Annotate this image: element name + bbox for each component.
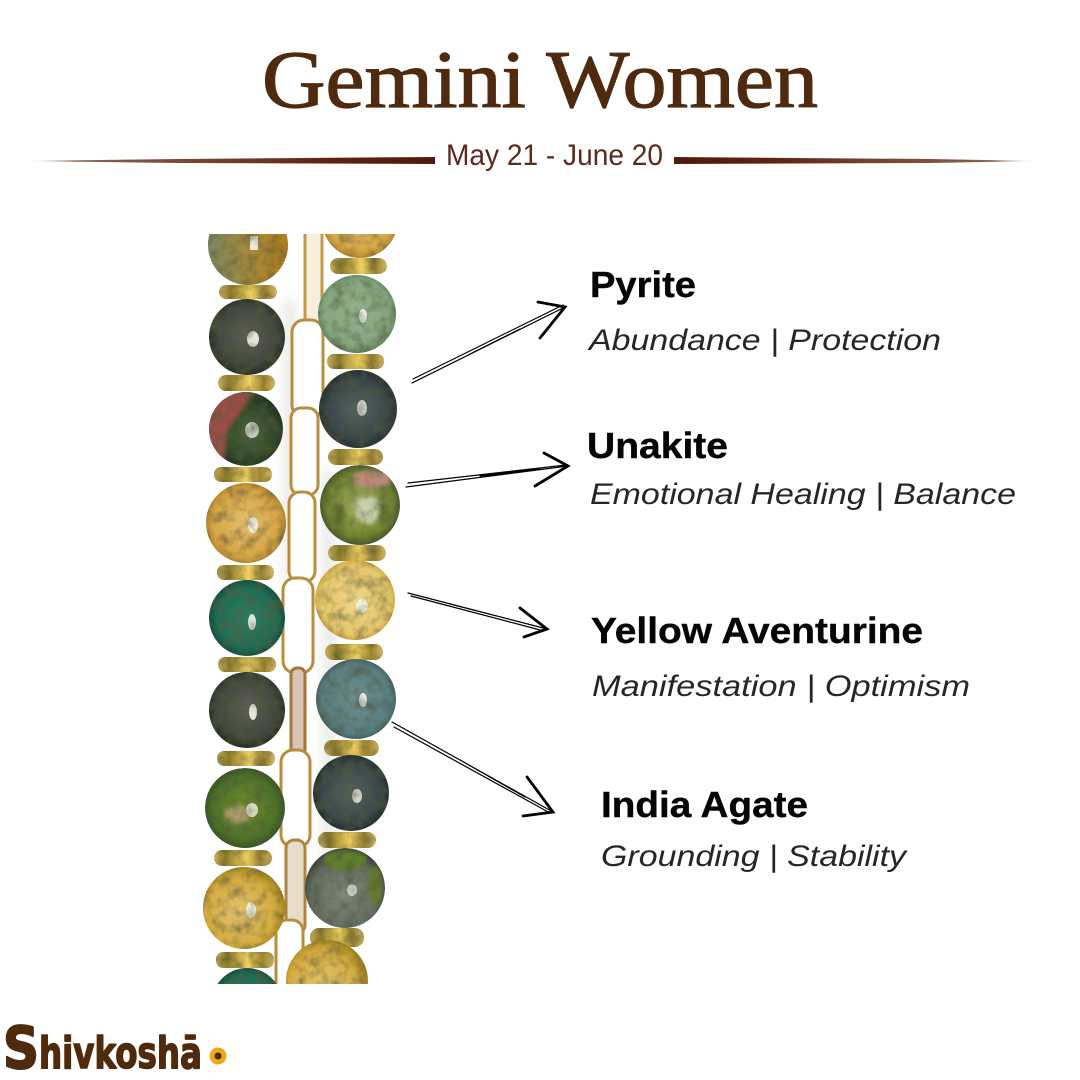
date divider: [25, 139, 1035, 172]
bead: yellow bottom: [286, 940, 368, 984]
right strand: [286, 234, 400, 984]
bead: yellow aventurine: [315, 560, 395, 640]
spacer: [324, 740, 379, 756]
bead: pyrite: [313, 755, 389, 831]
logo: Shivkosha: hivkoshā: [39, 1028, 202, 1079]
spacer: [214, 467, 272, 482]
arrow: to India Agate: [392, 722, 553, 816]
left strand: [203, 205, 288, 1038]
bead: pyrite: [319, 370, 397, 448]
spacer: [214, 850, 272, 866]
stone: Yellow Aventurine: [591, 610, 970, 703]
stone: Unakite: Unakite: [587, 425, 728, 466]
benefits: Grounding | Stability: [601, 840, 908, 873]
title: Gemini Women: [262, 34, 818, 125]
benefits: Abundance | Protection: [587, 324, 941, 357]
bead: unakite: [320, 465, 400, 545]
bead: unakite red: [205, 390, 283, 466]
arrow: to Pyrite: [412, 302, 565, 383]
spacer: [216, 952, 274, 968]
spacer: [217, 565, 274, 580]
bead: grey-green: [305, 848, 385, 928]
soft shadows behind chain: [283, 300, 336, 870]
spacer: [218, 657, 276, 672]
bead: india agate: [316, 659, 396, 739]
gold paperclip chain: [276, 225, 323, 1010]
benefits: Emotional Healing | Balance: [590, 478, 1016, 511]
bead: moss agate: [209, 580, 285, 656]
stone: Pyrite: [587, 264, 941, 357]
arrow: to Unakite: [406, 453, 568, 487]
benefits: Manifestation | Optimism: [592, 670, 970, 703]
bead bracelet photo: [203, 234, 400, 984]
bead: moss agate bottom: [218, 968, 276, 984]
spacer: [328, 449, 383, 465]
icon: sunflower: [210, 1048, 226, 1064]
bead: agate top: [208, 234, 288, 285]
arrow: to Yellow Aventurine: [408, 593, 547, 637]
spacer: [218, 375, 275, 391]
bead: pyrite: [209, 672, 285, 748]
stone: India Agate: [601, 784, 908, 873]
stone: Yellow Aventurine: Yellow Aventurine: [591, 610, 923, 651]
spacer: [219, 285, 277, 299]
bead: yellow: [203, 867, 285, 949]
spacer: [330, 258, 387, 274]
bead: unakite green: [205, 768, 285, 848]
spacer: [217, 751, 275, 766]
stone: Unakite: [587, 425, 1016, 511]
logo: Shivkosha: S: [3, 1014, 39, 1080]
spacer: [327, 354, 384, 369]
logo: Shivkosha: [3, 1014, 226, 1080]
bead: yellow amber: [206, 483, 286, 563]
spacer: [310, 928, 364, 947]
spacer: [328, 545, 386, 561]
stone: India Agate: India Agate: [601, 784, 808, 825]
spacer: [325, 644, 383, 660]
date range: May 21 - June 20: [446, 139, 663, 172]
bead: yellow top: [324, 234, 396, 258]
bead: green aventurine: [318, 275, 396, 353]
spacer: [318, 832, 376, 848]
stone: Pyrite: Pyrite: [590, 264, 696, 305]
bead: pyrite: [209, 299, 285, 375]
